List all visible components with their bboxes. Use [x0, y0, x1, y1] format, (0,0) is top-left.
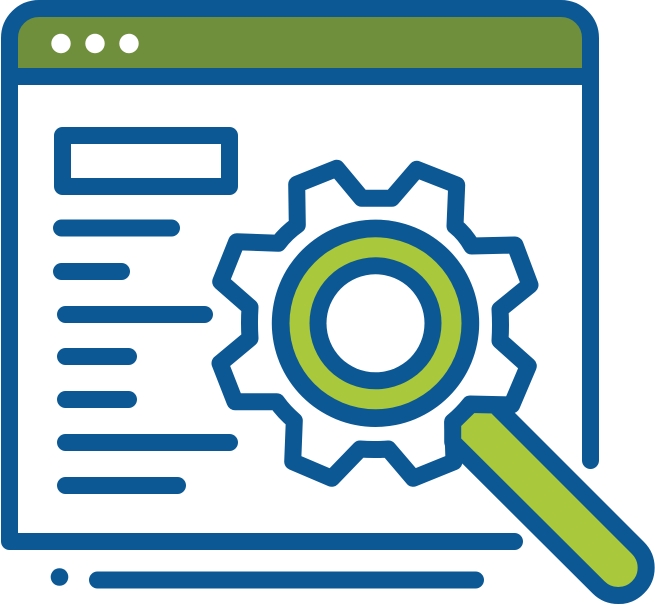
icon: window dots: [51, 34, 139, 53]
text placeholder lines: [62, 228, 230, 486]
panel: browser title bar: [10, 8, 590, 76]
icon: gear outline: [220, 168, 530, 478]
search box: [62, 136, 230, 186]
footer dot and line: [51, 568, 475, 586]
icon: magnifying glass lens: [272, 220, 479, 427]
panel: browser window frame: [10, 8, 590, 542]
icon: magnifying glass handle: [453, 404, 646, 596]
